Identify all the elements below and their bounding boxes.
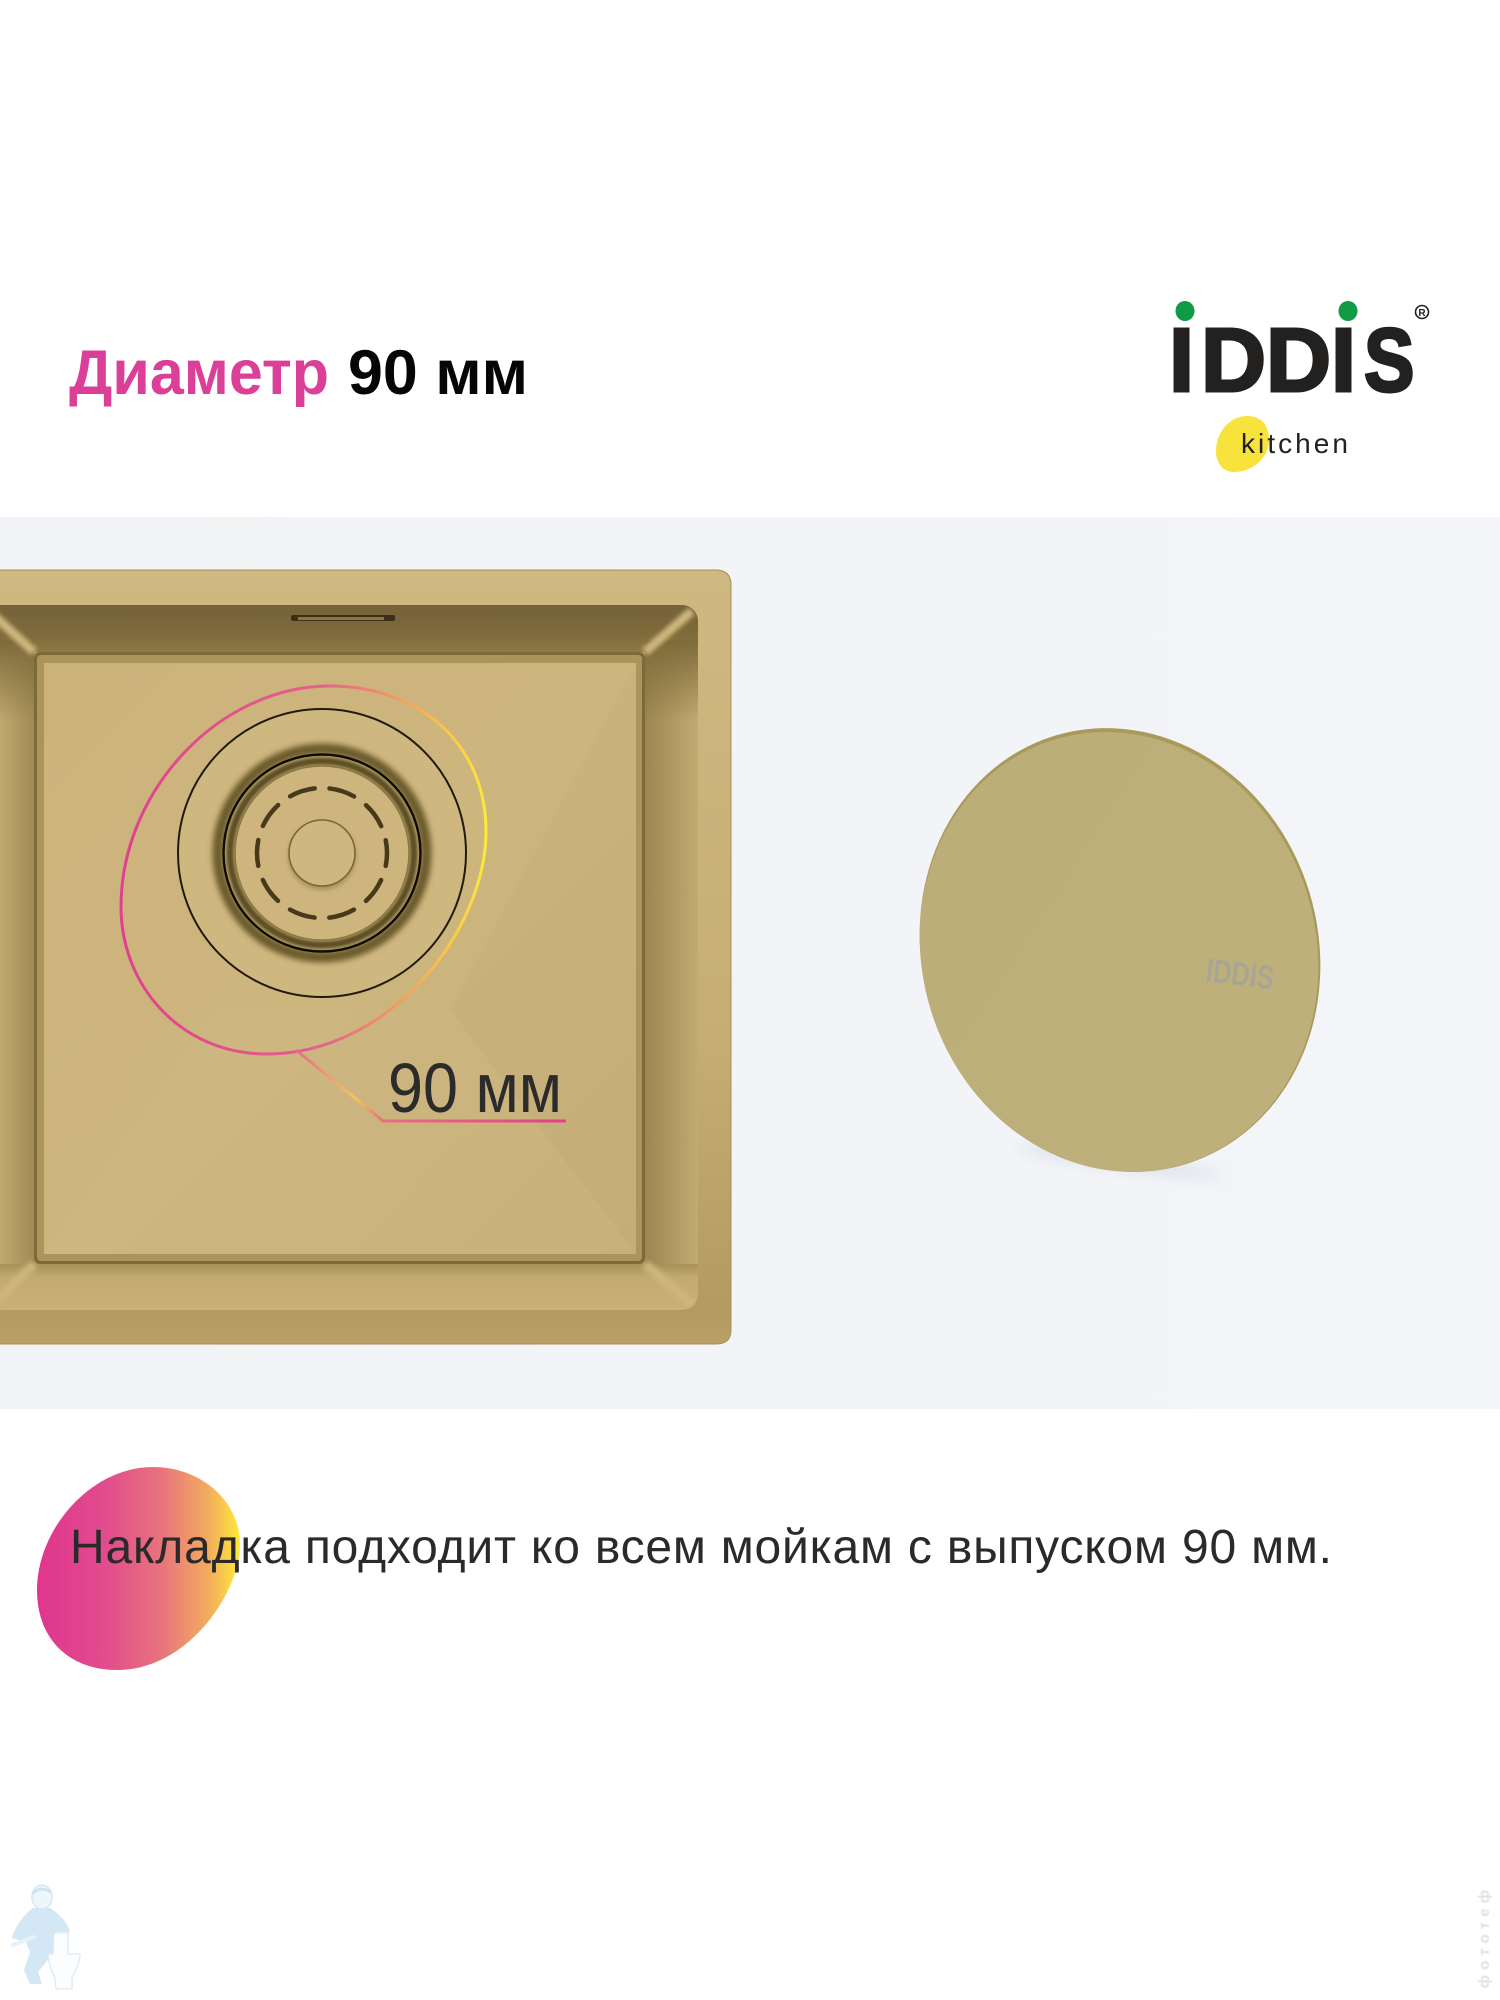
drain strainer: [178, 709, 466, 997]
logo wordmark: S: [1364, 310, 1414, 410]
title: Диаметр 90 мм: [69, 338, 528, 408]
decorative gradient blob: [37, 1467, 240, 1670]
sink top view: [0, 570, 731, 1344]
description text: Накладка подходит ко всем мойкам с выпуском 90 мм.: [70, 1521, 1332, 1574]
overflow slot: [291, 615, 395, 621]
sink walls: [0, 605, 698, 1310]
title: Диаметр 90 мм: 90 мм: [348, 338, 528, 408]
logo registered mark: [1416, 306, 1428, 319]
logo kitchen text: kitchen: [1241, 428, 1348, 459]
logo green dots: [1176, 301, 1358, 321]
plate face: [866, 682, 1372, 1222]
drain center knob: [288, 820, 356, 890]
toilet: [48, 1933, 80, 1989]
plate rim: [865, 678, 1375, 1222]
product panel background: [0, 517, 1500, 1409]
plumber wrench: [13, 1937, 34, 1945]
drain dark ring: [218, 749, 426, 957]
watermark: vertical text: фототеф: [1476, 1890, 1493, 1988]
leader line: [296, 1050, 566, 1121]
sink rim: [0, 570, 731, 1344]
title: Диаметр 90 мм: Диаметр: [69, 338, 329, 408]
logo: IDDIS kitchen: [1169, 301, 1428, 472]
round cover plate: [865, 678, 1375, 1222]
logo registered mark: R: [1418, 308, 1426, 319]
plate logo: IDDIS: [1204, 951, 1276, 996]
drain cap: [235, 766, 409, 940]
dimension label: 90 мм: [388, 1049, 562, 1127]
sink floor: [34, 652, 645, 1264]
plumber body: [12, 1908, 70, 1984]
drain flange: [178, 709, 466, 997]
drain dashes: [257, 788, 387, 918]
plumber head: [32, 1885, 52, 1909]
logo yellow blob: [1216, 416, 1269, 472]
watermark: plumber with toilet: [12, 1885, 80, 1989]
logo wordmark: IDDI: [1169, 311, 1356, 411]
gradient highlight loop: [121, 686, 486, 1054]
plate shadow: [1015, 1140, 1225, 1184]
